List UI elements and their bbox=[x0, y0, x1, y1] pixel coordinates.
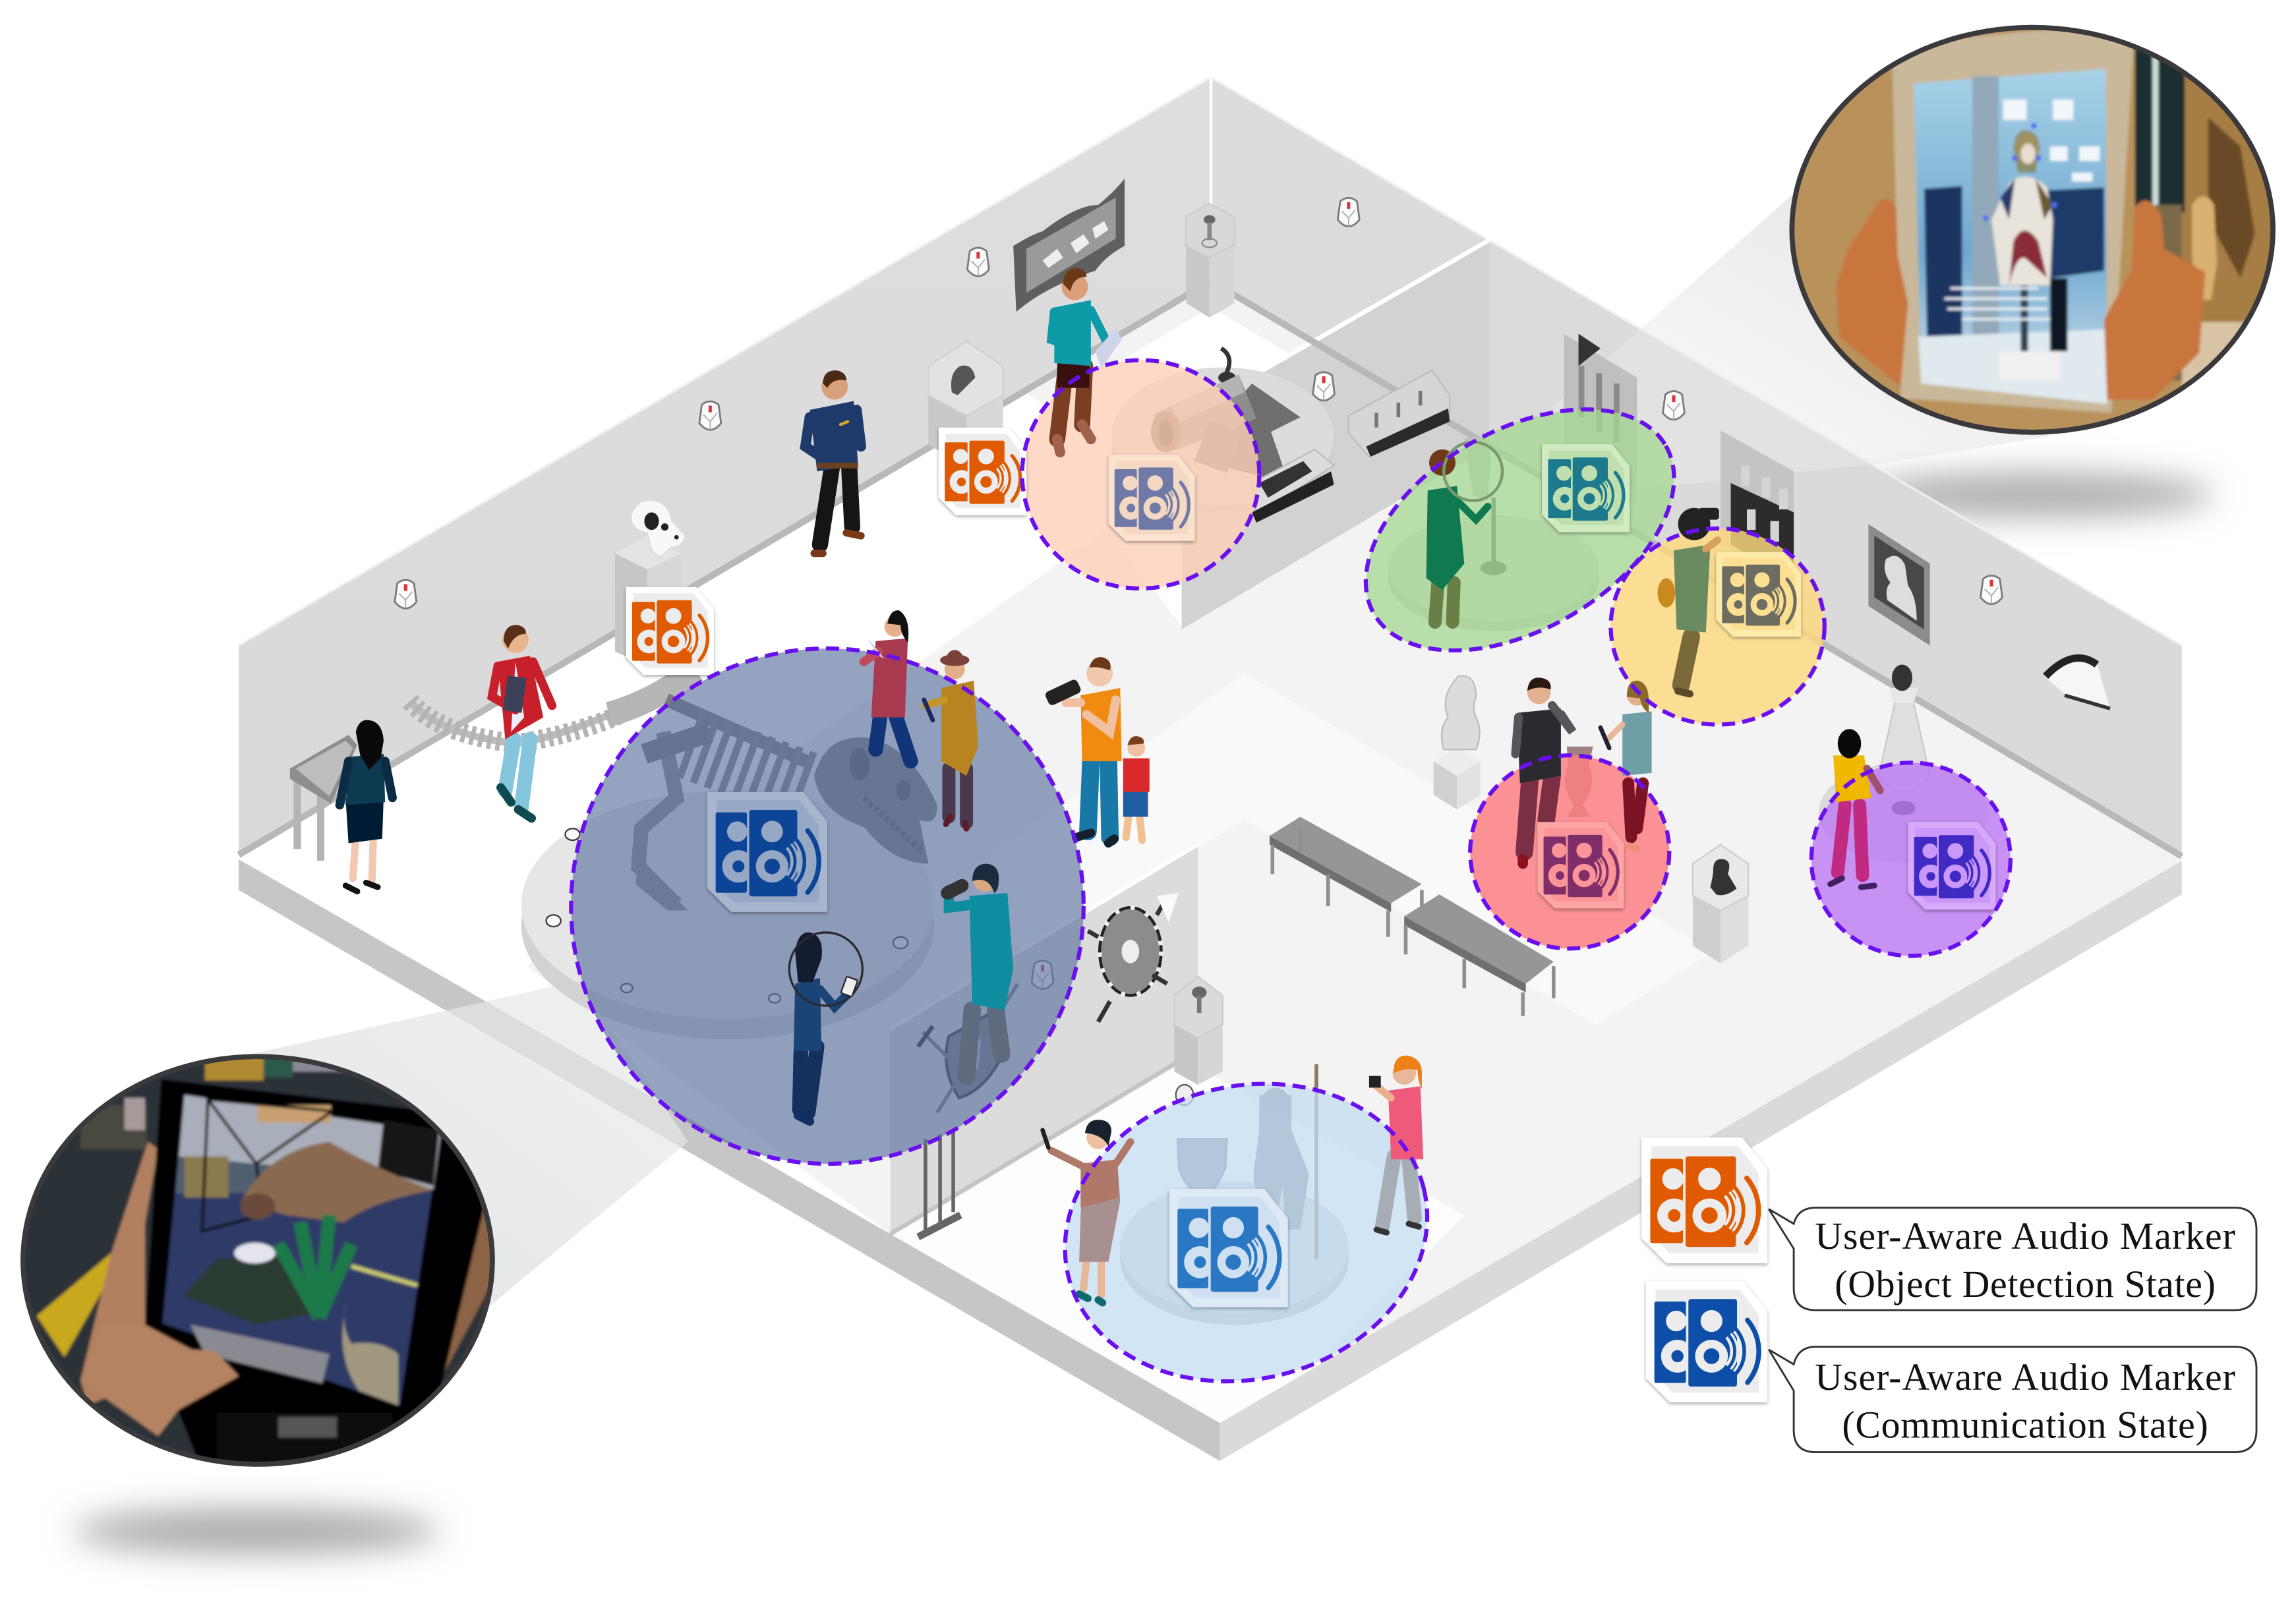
person: woman in red jacket bbox=[492, 625, 552, 818]
person: woman in pink bbox=[1369, 1056, 1423, 1232]
icon: marker in large blue zone bbox=[707, 792, 827, 912]
framed painting bbox=[1013, 179, 1125, 312]
person: woman in navy at table bbox=[339, 720, 392, 892]
pedestal with camera bbox=[1693, 845, 1748, 963]
centre partition bbox=[1182, 242, 1489, 629]
zone fill: purple bbox=[1811, 762, 2011, 956]
benches bbox=[1270, 817, 1554, 1016]
zone fill: yellow bbox=[1610, 529, 1825, 725]
slab side bbox=[239, 859, 1220, 1461]
green zone platform and exhibit bbox=[1388, 437, 1599, 631]
person: woman in coral coat bbox=[864, 610, 911, 761]
person: photographer in orange bbox=[1044, 657, 1122, 843]
back left wall bbox=[239, 78, 1211, 855]
front partition bbox=[891, 845, 1198, 1234]
vase bbox=[1565, 747, 1593, 817]
zone fill: large blue bbox=[571, 648, 1084, 1164]
callout: communication state: User-Aware Audio Marker bbox=[1815, 1357, 2235, 1398]
display case: coins bbox=[1252, 449, 1334, 523]
icon: orange marker near skull bbox=[626, 587, 714, 675]
callout: communication state bbox=[1769, 1347, 2256, 1452]
person: woman with phone bbox=[789, 932, 862, 1122]
skull pedestal bbox=[615, 500, 686, 666]
bust on pedestal bbox=[1434, 676, 1481, 809]
person: woman in mustard and hat bbox=[924, 650, 978, 828]
back right wall bbox=[1211, 78, 2182, 856]
callout: object detection state: User-Aware Audio Marker bbox=[1815, 1216, 2235, 1257]
display case: jewellery bbox=[1349, 370, 1450, 457]
armour platform and knight bbox=[1120, 1064, 1349, 1325]
projection cone: upper right bbox=[1552, 194, 2050, 490]
wall arch ornament bbox=[2044, 656, 2110, 708]
helmet case bbox=[928, 341, 1003, 465]
legend icon: communication state bbox=[1646, 1281, 1767, 1402]
icon: marker in peach zone bbox=[1109, 455, 1195, 541]
wheel on partition bbox=[1088, 893, 1179, 1021]
person: woman with arms raised bbox=[1043, 1120, 1131, 1303]
front pedestal bbox=[1174, 977, 1223, 1085]
dark vitrine bbox=[1564, 333, 1637, 505]
person: photographer in olive bbox=[1658, 508, 1719, 694]
dress platform bbox=[1819, 762, 1989, 862]
person: woman in green bbox=[1427, 442, 1502, 622]
floor bbox=[239, 281, 2182, 1423]
photo inset: tablet showing dinosaur AR bbox=[15, 1047, 505, 1486]
partition shield and swords bbox=[918, 984, 1018, 1112]
cannon bbox=[1151, 349, 1301, 483]
dinosaur platform bbox=[521, 791, 934, 1039]
person: woman in yellow and pink bbox=[1831, 729, 1880, 887]
person: woman in teal and red trousers bbox=[1601, 681, 1652, 849]
dinosaur skeleton bbox=[410, 670, 937, 952]
museum floor plan bbox=[239, 78, 2182, 1461]
zone fill: light blue bbox=[1033, 1047, 1459, 1419]
person: man in black bbox=[1516, 677, 1573, 864]
photo inset: tablet showing statue AR bbox=[1786, 22, 2284, 439]
icon: marker in purple zone bbox=[1908, 822, 1996, 910]
callout: object detection state: (Object Detection State) bbox=[1835, 1264, 2216, 1305]
icon: marker in light blue zone bbox=[1169, 1189, 1288, 1307]
icon: marker in green zone bbox=[1542, 444, 1630, 532]
dress mannequin bbox=[1879, 664, 1930, 815]
wall audio beacons bbox=[395, 198, 2002, 989]
corner pedestal bbox=[1186, 204, 1235, 318]
cannon platform bbox=[1111, 368, 1334, 514]
portrait bbox=[1868, 524, 1930, 646]
floating shadow: upper right bbox=[1857, 471, 2214, 518]
rope stands bbox=[918, 1130, 960, 1237]
callout: object detection state bbox=[1769, 1208, 2256, 1310]
icon: marker in yellow zone bbox=[1716, 552, 1801, 637]
legend icon: object detection state bbox=[1641, 1137, 1767, 1263]
skirting lines bbox=[239, 281, 2182, 856]
person: photographer in teal bbox=[947, 864, 1013, 1076]
zone fill: green bbox=[1324, 360, 1715, 701]
projection cone: lower left bbox=[252, 981, 688, 1310]
person: man in navy sweater bbox=[806, 370, 861, 554]
icon: orange marker near helmet bbox=[939, 428, 1026, 515]
zone outlines bbox=[571, 360, 2011, 1419]
table exhibit bbox=[290, 735, 357, 861]
person: man in teal shirt bbox=[1051, 268, 1122, 452]
zone fill: red bbox=[1470, 755, 1669, 948]
shelf cabinet bbox=[1721, 430, 1794, 586]
person: child bbox=[1123, 736, 1150, 840]
callout: communication state: (Communication State) bbox=[1842, 1404, 2208, 1446]
zone fill: peach bbox=[1022, 360, 1259, 588]
icon: marker in red zone bbox=[1537, 822, 1624, 908]
floating shadow: lower left bbox=[73, 1508, 439, 1555]
